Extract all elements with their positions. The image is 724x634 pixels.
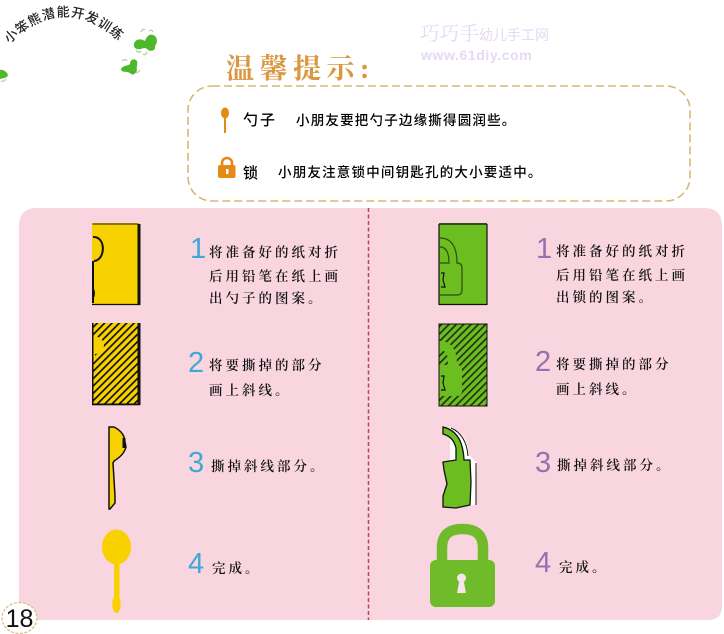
- step 1 text: 1: [190, 233, 206, 265]
- step 2 paper: lock hatched: [439, 324, 487, 406]
- pink panel: [19, 208, 722, 620]
- step 2 text: 画上斜线。: [209, 382, 292, 398]
- step 3 text: 3: [188, 447, 204, 479]
- watermark: www.61diy.com: [420, 47, 532, 63]
- tip: spoon: 小朋友要把勺子边缘撕得圆润些。: [296, 113, 516, 128]
- step 1 text: 出勺子的图案。: [209, 290, 324, 306]
- heading: 温馨提示:: [226, 52, 375, 85]
- step 2 text: 将要撕掉的部分: [556, 356, 672, 372]
- step 2 text: 2: [188, 347, 204, 379]
- step 2 text: 2: [535, 346, 551, 378]
- icon: spoon: [221, 108, 229, 133]
- icon: green butterfly cropped: [0, 70, 8, 81]
- step 3 text: [535, 447, 672, 479]
- icon: green butterfly large: [134, 29, 157, 55]
- step 1 text: 将准备好的纸对折: [556, 243, 688, 259]
- step 4 text: [188, 548, 262, 580]
- step 3 text: [188, 447, 326, 479]
- step 2 paper: spoon hatched: [92, 323, 140, 405]
- icon: green butterfly small: [121, 59, 140, 74]
- step 3 text: 撕掉斜线部分。: [211, 458, 326, 474]
- step 1 text: 出锁的图案。: [556, 289, 655, 305]
- step 2 text: [188, 347, 324, 398]
- step 2 text: 画上斜线。: [556, 381, 638, 397]
- tip: spoon: 勺子: [243, 112, 277, 129]
- watermark: [420, 23, 549, 63]
- tip: lock: 锁: [243, 165, 258, 182]
- icon: lock: [218, 158, 236, 178]
- spoon column: [92, 223, 341, 613]
- step 1 text: [190, 233, 341, 306]
- watermark: 巧巧手: [420, 23, 479, 45]
- step 3 torn lock: [443, 427, 477, 508]
- step 3 text: 撕掉斜线部分。: [557, 457, 672, 473]
- tips box: [188, 86, 690, 201]
- step 3 text: 3: [535, 447, 551, 479]
- watermark: 幼儿手工网: [479, 27, 549, 43]
- step 4 text: 完成。: [212, 560, 262, 576]
- step 1 text: 后用铅笔在纸上画: [209, 268, 341, 284]
- series title: curved text: 小笨熊潜能开发训练: [6, 6, 124, 42]
- step 1 paper: lock: [439, 223, 487, 305]
- step 1 text: [536, 233, 688, 305]
- step 4 text: 4: [535, 547, 551, 579]
- tip: lock: 小朋友注意锁中间钥匙孔的大小要适中。: [278, 164, 543, 180]
- lock column: [430, 223, 688, 607]
- step 4 finished lock: [430, 529, 495, 607]
- step 4 text: 4: [188, 548, 204, 580]
- page number: 18: [6, 605, 33, 633]
- step 2 text: [535, 346, 672, 397]
- step 1 text: 将准备好的纸对折: [209, 244, 341, 260]
- step 2 text: 将要撕掉的部分: [209, 357, 324, 373]
- step 4 text: [535, 547, 608, 579]
- step 1 paper: spoon: [92, 223, 140, 305]
- step 3 torn spoon: [109, 427, 126, 509]
- step 4 text: 完成。: [559, 559, 608, 575]
- step 4 finished spoon: [102, 530, 131, 613]
- step 1 text: 后用铅笔在纸上画: [556, 267, 688, 283]
- step 1 text: 1: [536, 233, 552, 265]
